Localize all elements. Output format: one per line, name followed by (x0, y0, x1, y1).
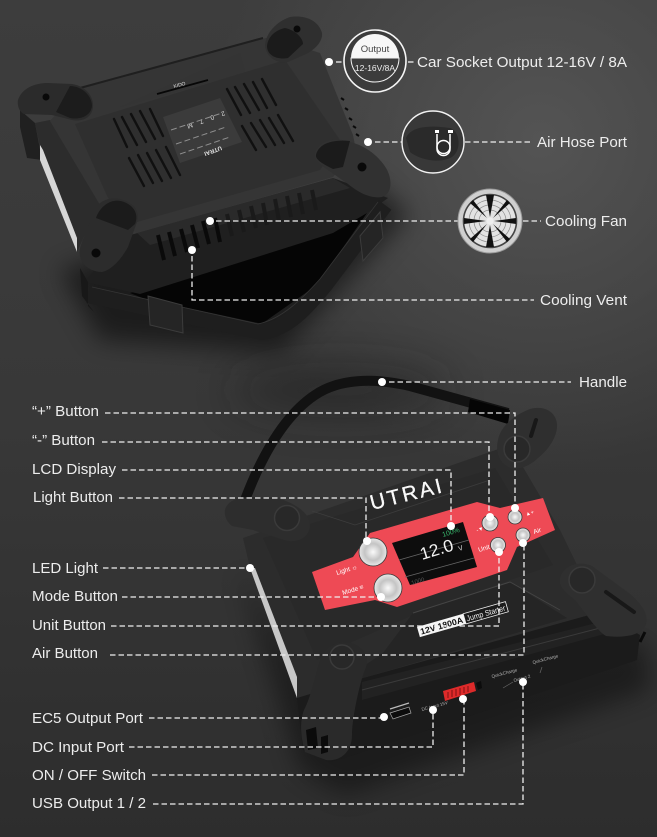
LCD display: 12.0 (418, 536, 456, 564)
black underside (130, 213, 367, 325)
callout: handle (378, 374, 627, 391)
LCD display: 1000 (411, 577, 426, 587)
power switch (443, 682, 476, 701)
buttons (359, 510, 530, 602)
left LED strip (40, 145, 77, 252)
LCD display (392, 522, 477, 587)
handle (245, 381, 508, 500)
panel button labels: -▼ (476, 526, 485, 534)
callout: light button: Light Button (33, 489, 113, 506)
callout: cooling fan (206, 189, 627, 253)
spec tag (417, 602, 508, 637)
left band (35, 120, 110, 252)
callout: LCD display: LCD Display (32, 461, 117, 478)
callout: cooling vent (188, 246, 628, 309)
vents on base (114, 79, 293, 186)
LED strip (250, 568, 297, 698)
callout: minus button: “-” Button (32, 432, 95, 449)
panel button labels: Mode ≡ (342, 584, 365, 597)
left band and face (243, 445, 600, 698)
side grip dots (341, 98, 359, 136)
rating label plate: UTRAI (203, 144, 222, 156)
callout: air button (32, 539, 527, 662)
battery cover (120, 53, 245, 107)
feet (18, 17, 391, 272)
callout: EC5 output port (32, 710, 388, 727)
panel button labels: Unit (478, 544, 491, 554)
callout: car socket output (325, 30, 627, 92)
logo: UTRAI (368, 475, 444, 515)
callout: EC5 output port: EC5 Output Port (32, 710, 144, 727)
icon: output badge (344, 30, 406, 92)
callout: unit button: Unit Button (32, 617, 106, 634)
callout: on/off switch (32, 695, 467, 784)
callout: unit button (32, 548, 503, 634)
base plate (50, 37, 356, 233)
LCD display: 100% (442, 527, 461, 539)
callout: on/off switch: ON / OFF Switch (32, 767, 146, 784)
panel button labels: ▲+ (525, 510, 535, 518)
product: jump starter rear view: KIDO (173, 81, 186, 90)
panel button labels: Air (533, 527, 543, 536)
callout: USB output (32, 678, 527, 812)
callout: car socket output: Car Socket Output 12-16V / 8A (417, 54, 627, 71)
callout: USB output: USB Output 1 / 2 (32, 795, 146, 812)
LCD display: V (458, 545, 464, 553)
callout: mode button: Mode Button (32, 588, 118, 605)
port labels: QuickCharge (532, 653, 559, 665)
icon: output badge: Output (361, 44, 390, 55)
callout: light button (33, 489, 371, 545)
callout: DC input port (32, 706, 437, 756)
feet (225, 408, 647, 760)
spec tag: Jump Starter (465, 604, 507, 623)
port labels (421, 653, 559, 712)
rating label plate (163, 98, 242, 163)
callout: minus button (32, 432, 494, 521)
drop shadow (60, 180, 410, 352)
strap handle (80, 202, 385, 333)
spec tag: 12V 1800A (419, 615, 464, 637)
callout: handle: Handle (579, 374, 627, 391)
rating label plate: 2 0 7 M (183, 109, 226, 130)
callout: LED light: LED Light (32, 560, 99, 577)
callout: cooling fan: Cooling Fan (545, 213, 627, 230)
port labels: Output 2 (513, 674, 531, 683)
callout: LED light (32, 560, 254, 577)
callout: LCD display (32, 461, 455, 530)
callout: plus button: “+” Button (32, 403, 99, 420)
front wall (297, 612, 640, 762)
product: jump starter rear view (18, 17, 410, 352)
panel button labels: Light ☼ (336, 564, 358, 577)
EC5 port (390, 707, 411, 719)
port labels: QuickCharge (491, 667, 518, 679)
callout: DC input port: DC Input Port (32, 739, 125, 756)
shadow (240, 570, 650, 795)
icon: cooling fan (458, 189, 522, 253)
side vents (158, 190, 316, 260)
left side wall (20, 110, 42, 160)
icon: output badge: 12-16V/8A (355, 63, 395, 73)
icon: air hose port (402, 111, 464, 173)
product: jump starter front view (225, 381, 650, 795)
panel button labels (336, 510, 543, 597)
callout: mode button (32, 588, 385, 605)
USB sockets (306, 727, 328, 754)
top edge (80, 38, 263, 88)
callout: air button: Air Button (32, 645, 98, 662)
callout: cooling vent: Cooling Vent (540, 292, 628, 309)
callout: plus button (32, 403, 519, 512)
red control panel (312, 498, 555, 610)
front wall with vents (85, 178, 388, 294)
callout: air hose port: Air Hose Port (537, 134, 628, 151)
port labels: DC Input 15V (421, 700, 448, 712)
callout: air hose port (364, 111, 628, 173)
